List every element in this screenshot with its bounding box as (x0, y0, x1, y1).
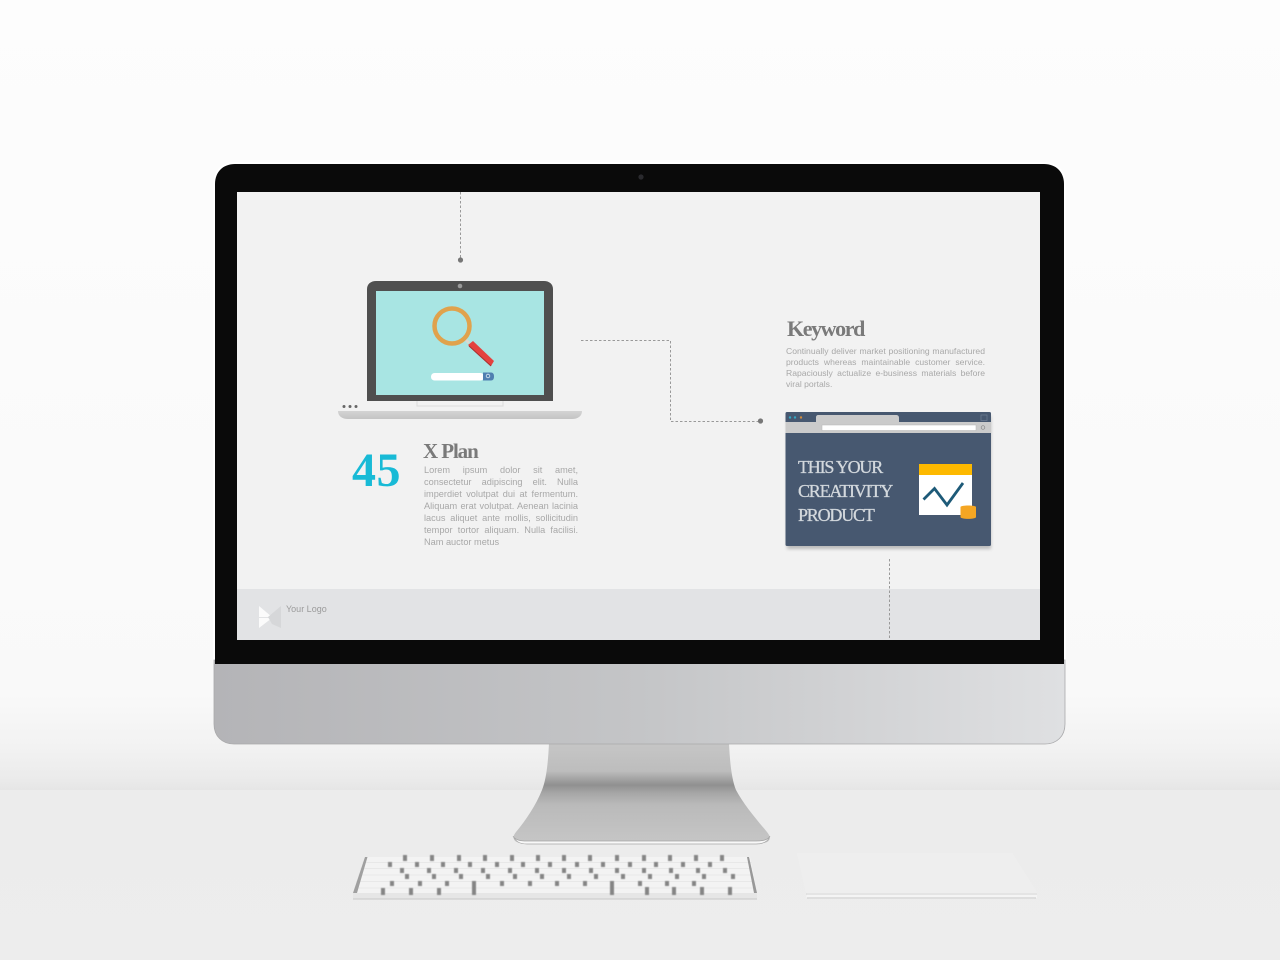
logo mark (259, 606, 281, 628)
text: X Plan body: Aliquam erat volutpat. Aenean lacinia (424, 501, 578, 511)
browser headline (798, 457, 893, 525)
monitor chin (214, 660, 1065, 744)
text: Keyword body: products whereas maintainable customer service. (786, 356, 985, 366)
monitor screen (237, 192, 1040, 640)
text: Keyword body: Rapaciously actualize e-business materials before (786, 368, 985, 378)
desk surface (0, 790, 1280, 960)
monitor rim highlight (213, 162, 1066, 664)
text: Keyword body: viral portals. (786, 378, 832, 388)
connector: top to laptop (458, 192, 463, 263)
text: X Plan body (424, 465, 578, 547)
monitor stand (513, 743, 770, 844)
trackpad (797, 853, 1037, 899)
slide footer band (237, 589, 1040, 640)
icon: laptop with magnifier (338, 281, 582, 419)
text: Keyword body: Continually deliver market positioning manufactured (786, 346, 985, 356)
text: X Plan body: tempor tortor aliquam. Nulla facilisi. (424, 525, 578, 535)
keyboard (353, 855, 757, 899)
monitor bezel (215, 164, 1064, 664)
monitor body (213, 162, 1066, 744)
icon: browser window with chart (786, 412, 991, 549)
browser headline: THIS YOUR (798, 457, 882, 477)
text: X Plan body: Lorem ipsum dolor sit amet, (424, 465, 578, 475)
webcam (638, 174, 644, 180)
text: X Plan body: Nam auctor metus (424, 537, 499, 547)
browser headline: PRODUCT (798, 505, 874, 525)
your logo label: Your Logo (286, 604, 327, 614)
connector: browser to bottom (888, 559, 890, 640)
text: X Plan body: consectetur adipiscing elit. Nulla (424, 477, 578, 487)
heading: X Plan: X Plan (423, 439, 478, 463)
stat number 45: 45 (352, 444, 401, 497)
text: Keyword body (786, 346, 985, 388)
text: X Plan body: lacus aliquet ante mollis, sollicitudin (424, 513, 578, 523)
text: X Plan body: imperdiet volutpat dui at fermentum. (424, 489, 578, 499)
connector: laptop to browser (581, 340, 763, 424)
browser headline: CREATIVITY (798, 481, 892, 501)
chart card (919, 464, 976, 519)
heading: Keyword: Keyword (787, 316, 864, 341)
